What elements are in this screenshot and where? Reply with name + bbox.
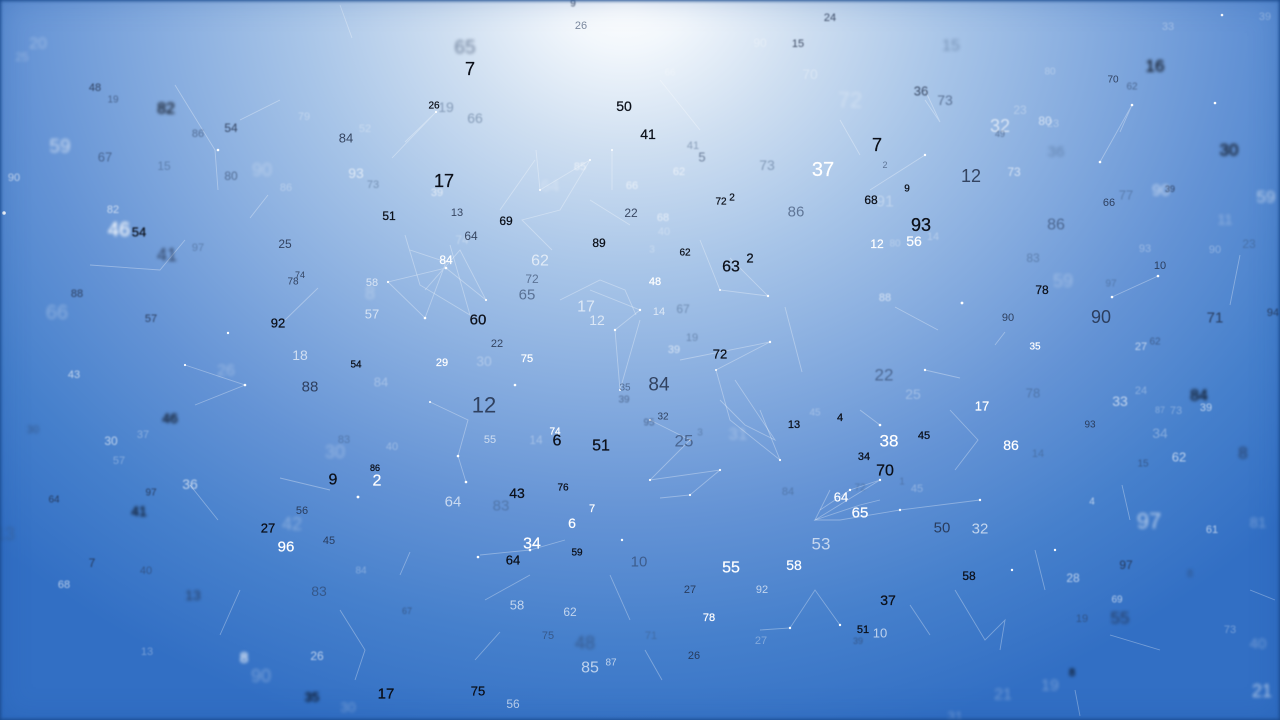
sharp dark numbers: 69 xyxy=(499,214,513,228)
mid-blur numbers: 85 xyxy=(574,161,586,173)
sharp white numbers: 57 xyxy=(365,306,379,322)
blurred far-field numbers: 30 xyxy=(1220,140,1238,160)
sharp white numbers: 18 xyxy=(292,347,308,363)
mid-blur numbers: 14 xyxy=(1032,448,1044,460)
sharp dark numbers: 27 xyxy=(684,584,696,596)
sharp dark numbers: 7 xyxy=(872,135,882,155)
mid-blur numbers: 61 xyxy=(1206,524,1218,536)
mid-blur numbers: 39 xyxy=(431,187,443,199)
sharp white numbers: 12 xyxy=(589,312,605,328)
blurred far-field numbers: 30 xyxy=(27,424,39,436)
blurred far-field numbers: 19 xyxy=(1041,678,1059,694)
sharp dark numbers: 2 xyxy=(882,160,888,170)
blurred far-field numbers: 97 xyxy=(1137,508,1161,534)
sharp dark numbers: 27 xyxy=(261,520,275,536)
sharp dark numbers: 93 xyxy=(1084,420,1096,430)
mid-blur numbers: 97 xyxy=(1105,278,1117,290)
mid-blur numbers: 36 xyxy=(182,476,198,492)
mid-blur numbers: 73 xyxy=(759,157,775,173)
mid-blur numbers: 54 xyxy=(132,224,146,240)
blurred far-field numbers: 81 xyxy=(1250,514,1266,532)
sharp dark numbers: 12 xyxy=(472,392,496,418)
mid-blur numbers: 97 xyxy=(1119,558,1133,572)
sharp dark numbers: 83 xyxy=(311,583,327,599)
mid-blur numbers: 69 xyxy=(1111,594,1123,606)
blurred far-field numbers: 65 xyxy=(454,38,476,58)
sharp dark numbers: 50 xyxy=(934,520,950,536)
mid-blur numbers: 73 xyxy=(1170,405,1182,417)
sharp white numbers: 48 xyxy=(649,276,661,288)
sharp white numbers: 64 xyxy=(834,490,848,504)
mid-blur numbers: 40 xyxy=(658,226,670,238)
sharp dark numbers: 92 xyxy=(271,316,285,330)
mid-blur numbers: 57 xyxy=(145,313,157,325)
blurred far-field numbers: 20 xyxy=(29,36,47,52)
mid-blur numbers: 74 xyxy=(455,233,469,247)
sharp dark numbers: 2 xyxy=(746,250,754,266)
sharp white numbers: 86 xyxy=(1003,437,1019,453)
blurred far-field numbers: 8 xyxy=(1187,568,1193,580)
mid-blur numbers: 72 xyxy=(854,482,866,494)
sharp dark numbers: 62 xyxy=(679,248,691,258)
blurred far-field numbers: 40 xyxy=(1250,636,1266,652)
sharp white numbers xyxy=(278,159,1041,711)
sharp white numbers: 62 xyxy=(563,605,577,619)
sharp white numbers: 74 xyxy=(549,426,561,438)
mid-blur numbers: 95 xyxy=(643,418,655,428)
mid-blur numbers: 91 xyxy=(876,194,894,210)
sharp dark numbers: 6 xyxy=(553,432,562,450)
sharp white numbers: 58 xyxy=(786,557,802,573)
blurred far-field numbers: 25 xyxy=(15,50,29,64)
sharp dark numbers: 9 xyxy=(904,184,910,194)
blurred far-field numbers: 41 xyxy=(131,503,147,519)
mid-blur numbers: 40 xyxy=(140,565,152,577)
sharp dark numbers: 64 xyxy=(464,229,478,243)
blurred far-field numbers: 8 xyxy=(1069,667,1075,679)
sharp dark numbers: 50 xyxy=(616,98,632,114)
mid-blur numbers: 5 xyxy=(698,150,706,164)
mid-blur numbers: 64 xyxy=(48,494,60,506)
sharp white numbers: 55 xyxy=(722,560,740,576)
mid-blur numbers: 84 xyxy=(782,486,794,498)
mid-blur numbers: 86 xyxy=(192,128,204,140)
sharp dark numbers: 37 xyxy=(880,592,896,608)
mid-blur numbers: 40 xyxy=(386,441,398,453)
mid-blur numbers: 67 xyxy=(402,606,412,616)
mid-blur numbers: 71 xyxy=(1207,310,1223,326)
blurred far-field numbers: 31 xyxy=(729,424,747,444)
blurred far-field numbers: 8 xyxy=(1238,444,1248,462)
mid-blur numbers: 28 xyxy=(1066,571,1080,585)
sharp dark numbers: 13 xyxy=(451,207,463,219)
mid-blur numbers: 77 xyxy=(1119,188,1133,202)
mid-blur numbers: 22 xyxy=(875,366,893,384)
mid-blur numbers: 49 xyxy=(995,129,1005,139)
mid-blur numbers: 3 xyxy=(649,244,655,256)
blurred far-field numbers: 46 xyxy=(162,410,178,426)
mid-blur numbers: 33 xyxy=(1162,21,1174,33)
sharp dark numbers: 70 xyxy=(1107,74,1119,86)
sharp white numbers: 32 xyxy=(972,520,988,538)
sharp dark numbers: 26 xyxy=(428,100,440,112)
blurred far-field numbers: 59 xyxy=(1257,188,1275,206)
sharp dark numbers: 22 xyxy=(491,338,503,350)
blurred far-field numbers: 26 xyxy=(217,362,235,380)
sharp dark numbers: 25 xyxy=(278,237,292,251)
blurred far-field numbers: 59 xyxy=(49,136,71,158)
mid-blur numbers: 84 xyxy=(355,566,367,576)
mid-blur numbers: 13 xyxy=(141,646,153,658)
sharp white numbers: 2 xyxy=(373,472,382,490)
mid-blur numbers: 15 xyxy=(792,38,804,50)
sharp dark numbers: 43 xyxy=(509,485,525,501)
sharp white numbers: 96 xyxy=(278,538,294,556)
mid-blur numbers: 26 xyxy=(310,649,324,663)
sharp dark numbers: 51 xyxy=(592,438,610,454)
sharp dark numbers: 10 xyxy=(1154,260,1166,272)
sharp dark numbers: 74 xyxy=(295,270,305,280)
mid-blur numbers: 19 xyxy=(107,94,119,106)
mid-blur numbers: 88 xyxy=(879,292,891,304)
blurred far-field numbers: 82 xyxy=(157,100,175,118)
sharp white numbers: 56 xyxy=(506,697,520,711)
mid-blur numbers: 7 xyxy=(89,556,96,570)
mid-blur numbers: 83 xyxy=(338,434,350,446)
sharp dark numbers: 13 xyxy=(788,419,800,431)
sharp dark numbers: 84 xyxy=(648,374,670,396)
sharp dark numbers: 78 xyxy=(287,276,299,288)
sharp dark numbers: 9 xyxy=(329,472,338,488)
mid-blur numbers: 14 xyxy=(927,231,939,243)
sharp dark numbers: 4 xyxy=(837,412,843,424)
sharp white numbers: 10 xyxy=(873,626,887,640)
blurred far-field numbers: 64 xyxy=(541,176,559,196)
mid-blur numbers: 19 xyxy=(686,332,698,344)
sharp dark numbers: 60 xyxy=(470,312,486,328)
mid-blur numbers: 43 xyxy=(68,369,80,381)
mid-blur numbers: 82 xyxy=(107,204,119,216)
blurred far-field numbers: 90 xyxy=(251,666,271,686)
mid-blur numbers: 83 xyxy=(1026,251,1040,265)
sharp white numbers: 56 xyxy=(906,233,922,249)
mid-blur numbers: 73 xyxy=(1007,165,1021,179)
sharp dark numbers xyxy=(261,20,1166,702)
sharp dark numbers: 45 xyxy=(918,430,930,442)
mid-blur numbers: 25 xyxy=(905,386,921,402)
sharp dark numbers: 78 xyxy=(1035,283,1049,297)
mid-blur numbers: 87 xyxy=(1155,405,1165,415)
sharp dark numbers: 89 xyxy=(592,236,606,250)
mid-blur numbers: 86 xyxy=(280,182,292,194)
blurred far-field numbers: 66 xyxy=(46,302,68,324)
mid-blur numbers: 4 xyxy=(1089,496,1095,508)
mid-blur numbers: 45 xyxy=(911,483,923,495)
mid-blur numbers: 36 xyxy=(914,84,928,98)
mid-blur numbers: 48 xyxy=(89,82,101,94)
sharp white numbers: 87 xyxy=(605,658,617,668)
sharp dark numbers: 64 xyxy=(506,552,520,568)
blurred far-field numbers: 46 xyxy=(108,219,130,241)
mid-blur numbers: 24 xyxy=(1135,385,1147,397)
sharp white numbers: 78 xyxy=(703,612,715,624)
mid-blur numbers: 37 xyxy=(137,429,149,441)
sharp dark numbers: 41 xyxy=(640,126,656,142)
blurred far-field numbers: 8 xyxy=(365,283,375,303)
blurred far-field numbers: 16 xyxy=(1146,56,1164,76)
sharp dark numbers: 17 xyxy=(434,171,454,191)
sharp dark numbers: 59 xyxy=(571,548,583,558)
mid-blur numbers: 73 xyxy=(937,92,953,108)
mid-blur numbers: 62 xyxy=(1172,450,1186,464)
blurred far-field numbers: 21 xyxy=(994,686,1012,704)
mid-blur numbers: 73 xyxy=(1224,624,1236,636)
mid-blur numbers: 68 xyxy=(58,579,70,591)
sharp white numbers: 64 xyxy=(445,494,461,510)
mid-blur numbers: 66 xyxy=(664,68,676,78)
mid-blur numbers: 54 xyxy=(224,121,238,135)
blurred far-field numbers: 90 xyxy=(1152,182,1170,200)
mid-blur numbers: 23 xyxy=(1013,103,1027,117)
sharp white numbers: 6 xyxy=(568,515,576,531)
mid-blur numbers: 67 xyxy=(98,150,112,164)
mid-blur numbers: 23 xyxy=(1242,237,1256,251)
mid-blur numbers: 80 xyxy=(1038,114,1052,128)
blurred far-field numbers: 30 xyxy=(325,442,345,462)
sharp dark numbers: 84 xyxy=(339,130,353,146)
mid-blur numbers: 62 xyxy=(1126,82,1138,92)
sharp white numbers: 55 xyxy=(484,434,496,446)
sharp dark numbers: 26 xyxy=(575,20,587,32)
blurred far-field numbers: 13 xyxy=(185,587,201,603)
sharp white numbers: 27 xyxy=(755,635,767,647)
blurred far-field numbers: 48 xyxy=(575,633,595,653)
mid-blur numbers: 93 xyxy=(1139,243,1151,255)
mid-blur numbers: 67 xyxy=(676,302,690,316)
sharp dark numbers: 93 xyxy=(911,215,931,235)
sharp dark numbers: 86 xyxy=(788,204,804,220)
mid-blur numbers: 15 xyxy=(157,159,171,173)
mid-blur numbers: 80 xyxy=(1044,66,1056,78)
sharp dark numbers: 12 xyxy=(961,166,981,186)
sharp white numbers: 92 xyxy=(756,584,768,596)
blurred far-field numbers: 84 xyxy=(1190,388,1208,404)
mid-blur numbers: 45 xyxy=(809,408,821,418)
mid-blur numbers: 39 xyxy=(853,636,863,646)
sharp white numbers: 85 xyxy=(581,660,599,676)
mid-blur numbers: 78 xyxy=(1026,386,1040,400)
mid-blur numbers: 3 xyxy=(697,428,703,438)
blurred far-field numbers: 72 xyxy=(838,88,862,112)
mid-blur numbers: 39 xyxy=(668,344,680,356)
mid-blur numbers: 83 xyxy=(493,498,509,514)
mid-blur numbers: 79 xyxy=(298,111,310,123)
mid-blur numbers: 84 xyxy=(374,374,388,390)
mid-blur numbers: 97 xyxy=(145,488,157,498)
sharp white numbers: 17 xyxy=(577,298,595,316)
sharp white numbers: 29 xyxy=(436,357,448,369)
mid-blur numbers: 57 xyxy=(113,455,125,467)
mid-blur numbers: 80 xyxy=(224,169,238,183)
sharp dark numbers: 63 xyxy=(722,258,740,276)
mid-blur numbers: 90 xyxy=(8,172,20,184)
blurred far-field numbers: 59 xyxy=(1053,271,1073,291)
sharp dark numbers: 17 xyxy=(378,686,394,702)
sharp white numbers: 65 xyxy=(852,504,868,522)
mid-blur numbers: 39 xyxy=(618,394,630,406)
blurred far-field numbers: 15 xyxy=(942,38,960,54)
mid-blur numbers: 19 xyxy=(1076,613,1088,625)
mid-blur numbers: 71 xyxy=(645,630,657,642)
mid-blur numbers: 66 xyxy=(467,110,483,126)
mid-blur numbers: 66 xyxy=(626,180,638,192)
sharp dark numbers: 45 xyxy=(323,535,335,547)
mid-blur numbers: 30 xyxy=(104,434,118,448)
sharp white numbers: 58 xyxy=(366,277,378,289)
mid-blur numbers: 15 xyxy=(1137,458,1149,470)
sharp dark numbers: 76 xyxy=(557,482,569,494)
blurred far-field numbers: 90 xyxy=(252,160,272,180)
sharp dark numbers: 51 xyxy=(382,209,396,223)
sharp dark numbers: 70 xyxy=(876,462,894,480)
sharp dark numbers: 34 xyxy=(858,451,870,463)
sharp dark numbers: 65 xyxy=(519,286,535,304)
sharp white numbers: 7 xyxy=(589,503,595,515)
sharp dark numbers: 22 xyxy=(624,206,638,220)
mid-blur numbers: 23 xyxy=(1047,118,1059,130)
mid-blur numbers: 93 xyxy=(348,165,364,181)
sharp dark numbers: 7 xyxy=(465,59,475,79)
sharp dark numbers: 72 xyxy=(715,196,727,208)
blurred far-field numbers: 41 xyxy=(157,245,177,265)
sharp white numbers: 37 xyxy=(812,159,834,181)
sharp dark numbers: 90 xyxy=(1002,312,1014,324)
mid-blur numbers: 97 xyxy=(192,242,204,254)
mid-blur numbers: 24 xyxy=(824,12,836,24)
mid-blur numbers: 1 xyxy=(899,476,905,488)
mid-blur numbers: 39 xyxy=(1200,402,1212,414)
mid-blur numbers: 52 xyxy=(359,123,371,135)
mid-blur numbers: 34 xyxy=(1152,425,1168,441)
sharp dark numbers: 90 xyxy=(1091,307,1111,327)
mid-blur numbers: 62 xyxy=(673,166,685,178)
sharp dark numbers: 35 xyxy=(619,382,631,394)
mid-blur numbers: 70 xyxy=(802,66,818,82)
sharp white numbers: 75 xyxy=(521,353,533,365)
sharp dark numbers: 2 xyxy=(729,192,735,204)
blurred far-field numbers: 8 xyxy=(240,650,248,666)
blurred far-field numbers: 30 xyxy=(340,699,356,715)
blurred far-field numbers: 11 xyxy=(1217,212,1233,228)
mid-blur numbers: 68 xyxy=(657,212,669,224)
sharp dark numbers: 75 xyxy=(542,630,554,642)
sharp dark numbers: 66 xyxy=(1103,197,1115,209)
sharp dark numbers: 58 xyxy=(962,569,976,583)
sharp dark numbers: 88 xyxy=(302,378,318,396)
sharp dark numbers: 72 xyxy=(713,346,727,362)
blurred far-field numbers: 36 xyxy=(1048,144,1064,160)
sharp white numbers: 84 xyxy=(439,253,453,267)
sharp dark numbers: 54 xyxy=(350,360,362,370)
mid-blur numbers: 73 xyxy=(367,179,379,191)
blurred far-field numbers: 42 xyxy=(282,514,302,534)
mid-blur numbers: 94 xyxy=(1267,307,1279,319)
mid-blur numbers: 39 xyxy=(1165,184,1175,194)
sharp dark numbers: 56 xyxy=(296,505,308,517)
sharp white numbers: 53 xyxy=(812,534,830,554)
blurred far-field numbers: 21 xyxy=(1252,681,1272,701)
sharp dark numbers: 51 xyxy=(857,624,869,636)
sharp white numbers: 38 xyxy=(880,432,898,450)
mid-blur numbers: 88 xyxy=(71,288,83,300)
mid-blur numbers: 39 xyxy=(1259,11,1271,23)
mid-blur numbers: 19 xyxy=(438,99,454,115)
sharp dark numbers: 86 xyxy=(370,463,380,473)
sharp white numbers: 17 xyxy=(975,398,989,414)
sharp dark numbers: 68 xyxy=(864,193,878,207)
sharp white numbers: 14 xyxy=(653,306,665,318)
sharp white numbers: 34 xyxy=(523,536,541,552)
sharp dark numbers: 72 xyxy=(525,272,539,286)
sharp white numbers: 58 xyxy=(510,598,524,612)
mid-blur numbers: 30 xyxy=(476,353,492,369)
mid-blur numbers: 32 xyxy=(990,116,1010,136)
blurred far-field numbers: 55 xyxy=(1111,608,1129,628)
sharp white numbers: 62 xyxy=(531,252,549,270)
sharp dark numbers: 32 xyxy=(657,412,669,422)
sharp dark numbers: 10 xyxy=(631,554,647,570)
mid-blur numbers: 90 xyxy=(1209,244,1221,256)
mid-blur numbers: 86 xyxy=(1047,216,1065,234)
mid-blur numbers: 33 xyxy=(1112,393,1128,409)
mid-blur numbers: 80 xyxy=(889,238,901,250)
mid-blur numbers: 90 xyxy=(753,36,767,50)
mid-blur numbers: 41 xyxy=(687,140,699,152)
sharp dark numbers: 26 xyxy=(688,650,700,662)
sharp dark numbers: 25 xyxy=(675,432,693,450)
sharp white numbers: 12 xyxy=(870,237,884,251)
sharp dark numbers: 75 xyxy=(471,684,485,698)
mid-blur numbers: 14 xyxy=(529,433,543,447)
blurred far-field numbers: 35 xyxy=(305,690,319,704)
mid-blur numbers: 62 xyxy=(1149,336,1161,348)
sharp white numbers: 35 xyxy=(1029,342,1041,352)
mid-blur numbers: 27 xyxy=(1135,341,1147,353)
